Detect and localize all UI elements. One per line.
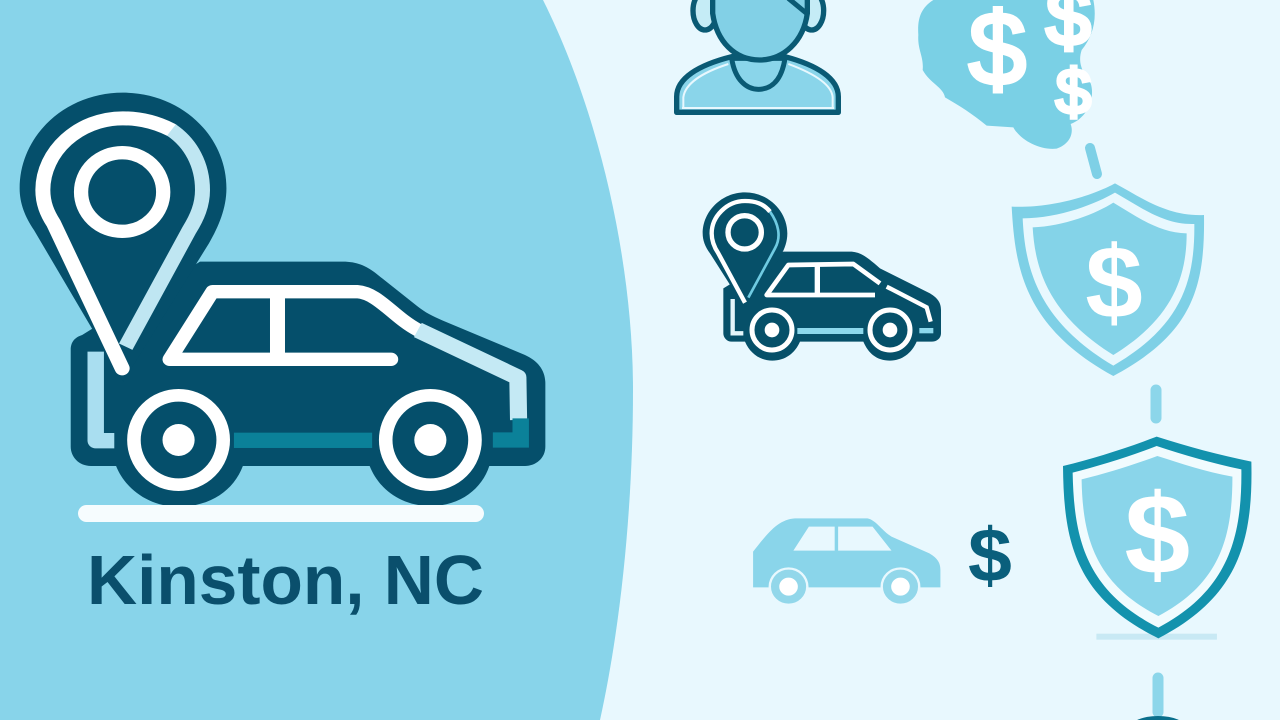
shoulder highlight <box>682 64 834 108</box>
left window <box>793 527 835 551</box>
small hood line <box>887 287 931 322</box>
shoulders <box>677 57 838 112</box>
hair strand <box>788 0 807 14</box>
teal shield dollar: $ <box>1125 470 1190 598</box>
car body silhouette <box>71 262 545 507</box>
pin outline right <box>126 130 202 347</box>
icon: dark dome at bottom edge <box>1130 716 1186 720</box>
rear wheel <box>134 395 223 485</box>
pin silhouette <box>20 93 226 382</box>
small front trim <box>919 328 933 333</box>
cloud shape <box>918 0 1095 149</box>
teal shield band <box>1073 446 1241 628</box>
window pillar <box>256 292 298 359</box>
face <box>713 0 807 60</box>
light car body <box>753 518 940 587</box>
shield ground line <box>1096 634 1217 640</box>
rear trim <box>96 352 114 441</box>
light rear wheel <box>769 567 809 606</box>
small pillar <box>809 265 825 295</box>
hood line <box>418 330 519 420</box>
title: Kinston, NC <box>87 541 484 619</box>
small car body <box>723 252 941 361</box>
panel: curved blue left panel <box>0 0 633 720</box>
light front wheel <box>880 567 920 606</box>
icon: large car with location pin <box>20 93 545 507</box>
icon: person <box>677 0 838 112</box>
neck <box>732 58 785 89</box>
dark dollar sign: $ <box>968 514 1012 598</box>
right window <box>838 527 892 551</box>
shield band <box>1023 193 1194 366</box>
ground line <box>78 505 484 522</box>
teal shield inner <box>1082 456 1232 616</box>
small front wheel <box>870 310 910 350</box>
small window frame <box>767 264 880 295</box>
connector dash: cloud to shield <box>1090 148 1097 174</box>
icon: light shield with dollar <box>1012 183 1204 376</box>
dollar sign lower right: $ <box>1056 57 1091 127</box>
window frame <box>170 292 418 359</box>
small rear trim <box>733 299 743 333</box>
icon: money cloud <box>918 0 1095 149</box>
connector dash: light shield to teal shield <box>1150 390 1162 418</box>
small pin ring <box>728 216 761 249</box>
connector dash: teal shield to next icon <box>1152 678 1164 712</box>
pin outline left <box>43 118 171 368</box>
front wheel <box>386 395 475 485</box>
small pin body <box>703 192 787 308</box>
shield dollar: $ <box>1085 225 1143 340</box>
small rear wheel <box>752 310 792 350</box>
small pin outline <box>712 201 770 303</box>
pin inner ring <box>81 153 163 231</box>
sill strip <box>234 433 372 448</box>
shield outer <box>1012 183 1204 376</box>
icon: small car with pin <box>703 192 941 361</box>
icon: small light car <box>753 514 1012 606</box>
shield inner <box>1033 203 1187 355</box>
icon: teal shield with dollar <box>1063 437 1251 640</box>
small sill <box>797 328 863 334</box>
front lower trim <box>493 418 521 440</box>
small pin outline right <box>748 212 779 298</box>
teal shield outer <box>1063 437 1251 638</box>
ears <box>693 0 824 30</box>
